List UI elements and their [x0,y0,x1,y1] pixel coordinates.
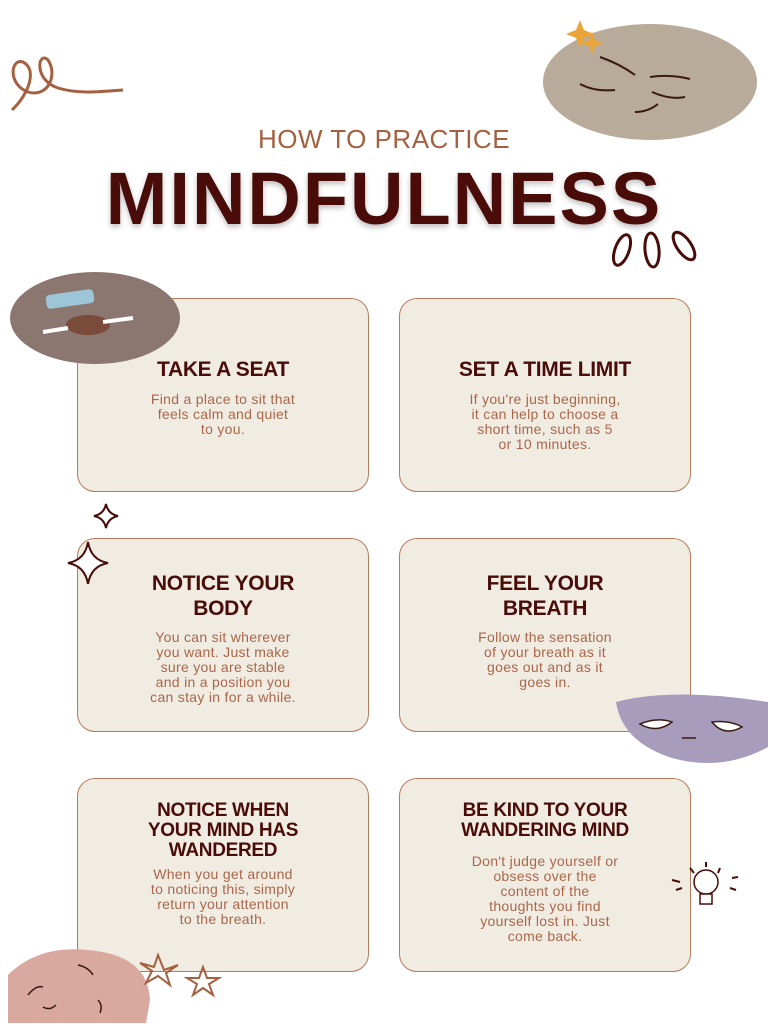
card: be kind: content of the [500,883,590,899]
card: feel your breath: goes out and as it [487,659,603,675]
decoration: pink face with stars [8,949,222,1023]
card: be kind: thoughts you find [489,898,601,914]
card: notice your body: you want. Just make [156,644,290,660]
card: feel your breath: of your breath as it [484,644,606,660]
card: notice when wandered: return your attention [157,896,289,912]
decoration: sparkles [68,504,118,584]
card: be kind: yourself lost in. Just [480,913,610,929]
decoration: bandage face [10,272,180,364]
decoration: swirl [11,56,124,112]
card: set a time limit [399,298,691,492]
card: be kind: obsess over the [493,868,597,884]
card: feel your breath: Follow the sensation [478,629,612,645]
decoration: beige face [543,20,757,140]
icon: lightbulb [672,862,738,905]
card: take a seat [77,298,369,492]
card: notice when wandered: YOUR MIND HAS [148,820,298,841]
card: take a seat: to you. [201,421,245,437]
card: feel your breath [399,538,691,732]
card: notice when wandered: to the breath. [180,911,266,927]
card: take a seat: TAKE A SEAT [157,358,289,381]
card: feel your breath: BREATH [503,597,587,620]
card: set a time limit: short time, such as 5 [477,421,613,437]
card: notice when wandered: When you get around [153,866,293,882]
card: feel your breath: goes in. [519,674,571,690]
card: take a seat: feels calm and quiet [158,406,288,422]
card: be kind: come back. [508,928,582,944]
card: be kind: Don't judge yourself or [472,853,618,869]
decoration: purple face [616,694,768,763]
card: be kind [399,778,691,972]
card: notice your body: sure you are stable [161,659,285,675]
card: notice your body [77,538,369,732]
card: be kind: WANDERING MIND [461,820,629,841]
card: notice your body: BODY [193,597,253,620]
card: be kind: BE KIND TO YOUR [463,800,627,821]
card: notice your body: NOTICE YOUR [152,572,294,595]
card: notice your body: can stay in for a while. [150,689,296,705]
card: notice when wandered: to noticing this, simply [151,881,295,897]
card: set a time limit: it can help to choose a [472,406,618,422]
subtitle: HOW TO PRACTICE [258,124,510,154]
decoration: drops [612,230,696,268]
card: set a time limit: If you're just beginning, [469,391,621,407]
card: notice your body: and in a position you [156,674,290,690]
card: feel your breath: FEEL YOUR [487,572,603,595]
card: set a time limit: SET A TIME LIMIT [459,358,631,381]
card: notice when wandered: WANDERED [169,840,277,861]
card: notice when wandered: NOTICE WHEN [157,800,289,821]
card: notice when wandered [77,778,369,972]
card: take a seat: Find a place to sit that [151,391,295,407]
title: MINDFULNESS [106,157,662,240]
card: notice your body: You can sit wherever [155,629,291,645]
card: set a time limit: or 10 minutes. [499,436,591,452]
